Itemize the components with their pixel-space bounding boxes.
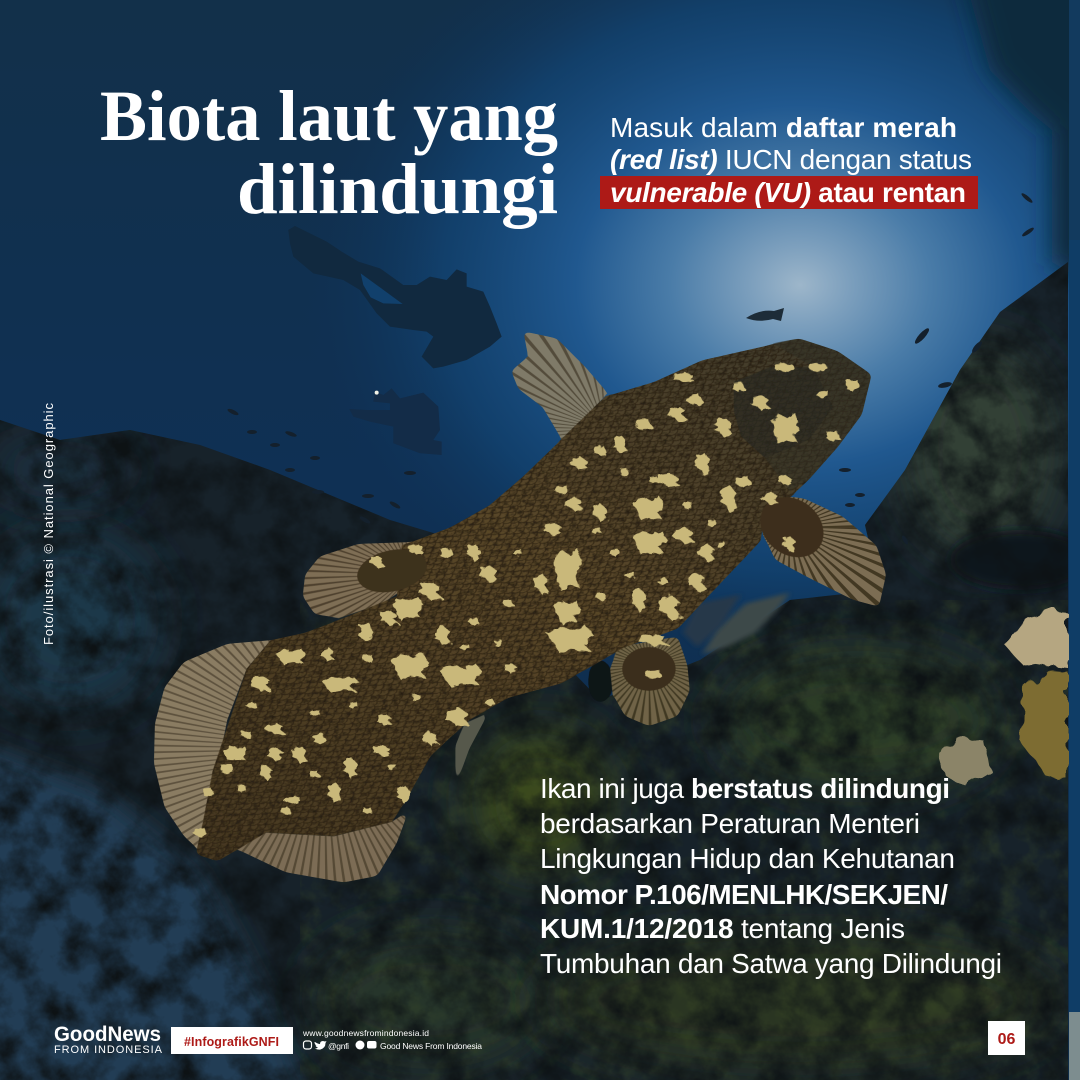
dorsal fin <box>512 332 614 443</box>
title <box>100 76 558 229</box>
body paragraph: legal protection: Lingkungan Hidup dan Kehutanan <box>540 843 955 874</box>
diver silhouette lower <box>349 388 442 455</box>
page number <box>988 1021 1025 1055</box>
lower fin <box>234 810 406 882</box>
right edge image strip <box>1069 0 1080 1080</box>
title: Biota laut yang <box>100 76 558 156</box>
icon: instagram <box>304 1041 312 1049</box>
footer contact and social icons: www.goodnewsfromindonesia.id <box>302 1028 429 1038</box>
photo credit: Foto/ilustrasi © National Geographic <box>41 402 56 645</box>
footer logo: GoodNews From Indonesia: GoodNews <box>54 1023 161 1046</box>
pale body blotches <box>194 364 860 837</box>
body paragraph: legal protection: Tumbuhan dan Satwa yang Dilindungi <box>540 948 1002 979</box>
footer logo: GoodNews From Indonesia <box>54 1023 163 1056</box>
pelvic fin <box>604 632 690 726</box>
hashtag badge: #InfografikGNFI <box>184 1035 279 1049</box>
fish body <box>194 338 871 860</box>
hashtag badge <box>171 1027 293 1054</box>
icon: youtube <box>367 1041 376 1048</box>
coral cluster right <box>938 610 1068 785</box>
highlight: vulnerable status: vulnerable (VU) atau rentan <box>610 177 966 208</box>
icon: twitter <box>314 1041 326 1050</box>
diver silhouette upper <box>288 226 502 368</box>
shadow beneath belly <box>588 661 613 703</box>
second fish in background <box>683 593 789 654</box>
body paragraph: legal protection: KUM.1/12/2018 tentang Jenis <box>540 913 905 944</box>
school of small fish <box>227 192 1035 580</box>
page number: 06 <box>998 1031 1016 1048</box>
title: dilindungi <box>237 149 558 229</box>
subtitle: red list status: (red list) IUCN dengan status <box>610 144 972 175</box>
caudal fin <box>154 639 276 852</box>
second dorsal fin <box>303 541 414 622</box>
body paragraph: legal protection: berdasarkan Peraturan Menteri <box>540 808 920 839</box>
footer contact and social icons <box>302 1028 482 1051</box>
footer logo: GoodNews From Indonesia: FROM INDONESIA <box>54 1044 163 1056</box>
body paragraph: legal protection: Nomor P.106/MENLHK/SEKJEN/ <box>540 879 948 910</box>
subtitle: red list status: Masuk dalam daftar merah <box>610 112 957 143</box>
footer contact and social icons: @gnfi <box>328 1041 349 1051</box>
subtitle: red list status <box>600 112 978 209</box>
body paragraph: legal protection <box>540 773 1002 979</box>
footer contact and social icons: Good News From Indonesia <box>380 1041 482 1051</box>
coelacanth fish <box>154 332 886 882</box>
small anal fin <box>455 713 489 789</box>
pectoral fin <box>758 492 886 606</box>
body paragraph: legal protection: Ikan ini juga berstatus dilindungi <box>540 773 950 804</box>
background: rocky seabed <box>0 262 1068 1080</box>
icon: facebook <box>356 1040 364 1050</box>
